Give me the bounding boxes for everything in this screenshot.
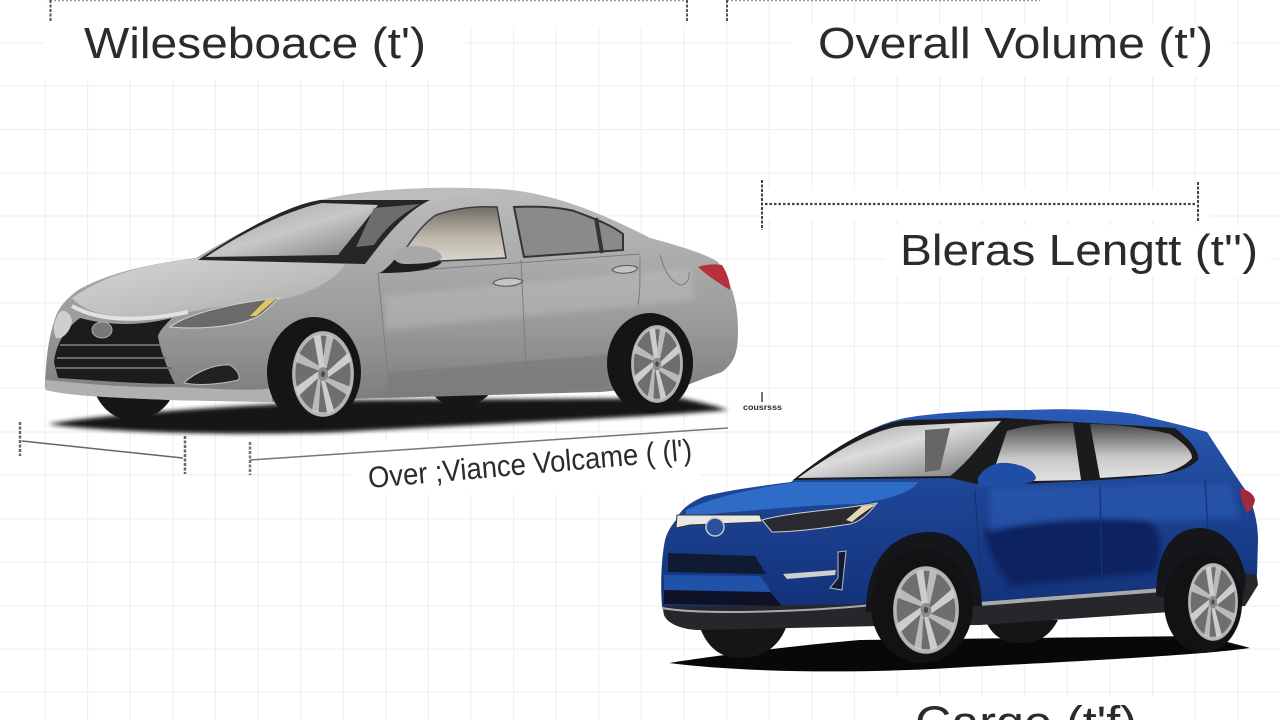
suv headlight <box>762 503 877 532</box>
suv sill chrome <box>979 590 1162 604</box>
sedan lower door shading <box>385 352 640 398</box>
dimension line: lower left <box>20 422 185 474</box>
sedan windshield <box>206 203 378 257</box>
dimension marker: small label: cousrsss <box>743 403 783 412</box>
sedan front side window <box>402 207 506 261</box>
sedan door highlight <box>385 268 695 330</box>
dimension marker: small label <box>743 392 783 412</box>
sedan bumper strip <box>45 380 272 402</box>
suv rear side window <box>1090 424 1192 478</box>
sedan body <box>45 188 738 402</box>
suv windshield <box>798 421 1001 478</box>
sedan door seams <box>378 254 689 378</box>
heading: slanted overall volume label: Over ;Viance Volcame ( (l') <box>367 434 693 495</box>
sedan tail light <box>698 264 730 290</box>
suv mirror <box>978 463 1036 486</box>
suv dark door reflection <box>984 519 1160 586</box>
suv rear wheel <box>1164 553 1242 653</box>
sedan headlight <box>170 298 279 328</box>
suv body <box>661 409 1258 606</box>
dimension line: top <box>50 0 1040 22</box>
sedan window frame <box>198 200 430 264</box>
dimension line: lower long <box>250 428 728 475</box>
car: blue suv <box>661 409 1258 671</box>
suv rear wheel arch <box>1156 528 1246 610</box>
sedan rear pillar <box>596 218 602 253</box>
suv side air trim <box>783 570 836 579</box>
suv window frame <box>793 418 1198 486</box>
heading: length label: Bleras Lengtt (t'') <box>900 226 1258 275</box>
suv bumper chrome <box>662 605 873 612</box>
heading: wheelbase label: Wileseboace (t') <box>84 19 426 68</box>
suv front wheel arch <box>866 532 982 612</box>
sedan grille chrome <box>72 306 188 319</box>
sedan mirror cap <box>394 246 442 264</box>
dimension line: right <box>762 180 1198 230</box>
suv lower blue panel <box>664 575 776 604</box>
sedan rear wheel <box>607 313 693 413</box>
car: silver sedan <box>45 188 738 434</box>
heading: overall volume label: Overall Volume (t') <box>818 19 1213 68</box>
sedan hood <box>72 258 345 318</box>
suv hood sheen <box>686 482 918 516</box>
suv front wheel <box>871 549 973 663</box>
sedan mirror <box>380 256 442 273</box>
suv badge <box>706 518 724 536</box>
sedan roof highlight <box>320 191 510 262</box>
sedan front wheel <box>267 317 361 427</box>
sedan quarter glass <box>356 204 420 247</box>
sedan under tires <box>92 385 492 420</box>
suv front side window <box>990 423 1081 482</box>
suv windshield pillar inner <box>925 428 950 472</box>
suv upper door sheen <box>990 484 1240 533</box>
suv upper intake <box>668 553 766 574</box>
suv door seam <box>975 480 1208 600</box>
suv lower cladding <box>662 570 1258 630</box>
sedan badge <box>92 322 112 338</box>
sedan door handles <box>493 266 638 286</box>
sedan grille <box>54 306 188 384</box>
suv grille bar <box>676 515 762 528</box>
suv lower intake <box>664 590 782 606</box>
suv under tires <box>699 620 1058 658</box>
sedan rear side window <box>514 207 623 257</box>
suv tail light <box>1240 488 1255 512</box>
sedan fog lamp <box>184 365 239 384</box>
sedan left light <box>54 311 72 338</box>
sedan ground shadow <box>48 398 728 434</box>
suv fog detail <box>830 551 846 590</box>
suv ground shadow <box>669 636 1250 671</box>
